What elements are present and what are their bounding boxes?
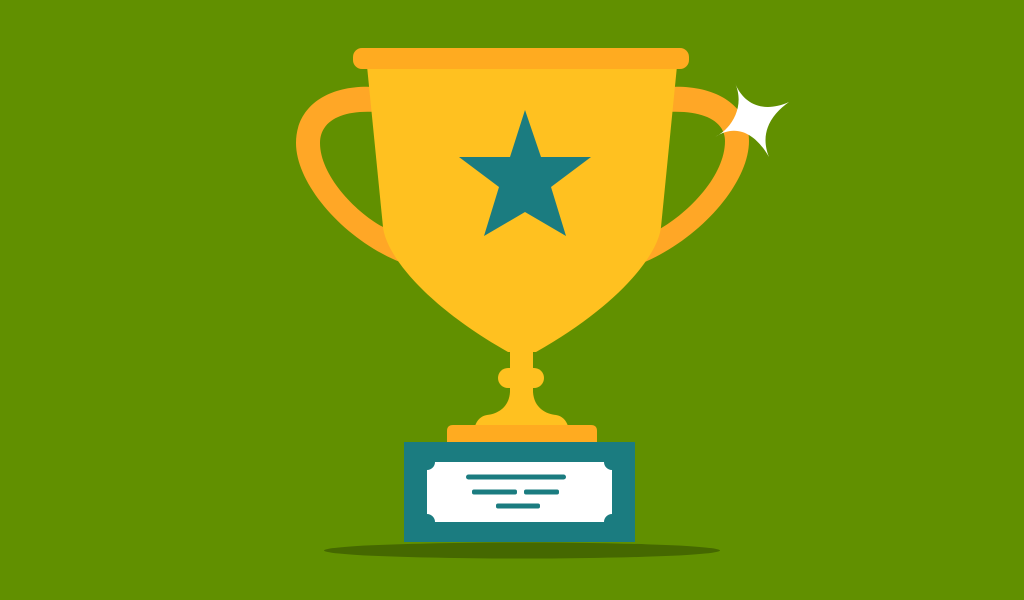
stem knob [498,368,544,388]
trophy base [447,425,597,442]
icon: right handle [640,87,749,264]
pedestal block [404,442,635,542]
trophy stem and foot [475,350,568,426]
ground shadow [324,542,720,558]
plate background [427,462,612,522]
engraved lines [466,474,566,508]
icon: sparkle [715,83,789,157]
trophy rim [353,48,689,69]
icon: left handle [296,87,400,262]
star emblem [459,110,591,236]
trophy cup body [367,66,677,352]
nameplate [427,462,612,522]
